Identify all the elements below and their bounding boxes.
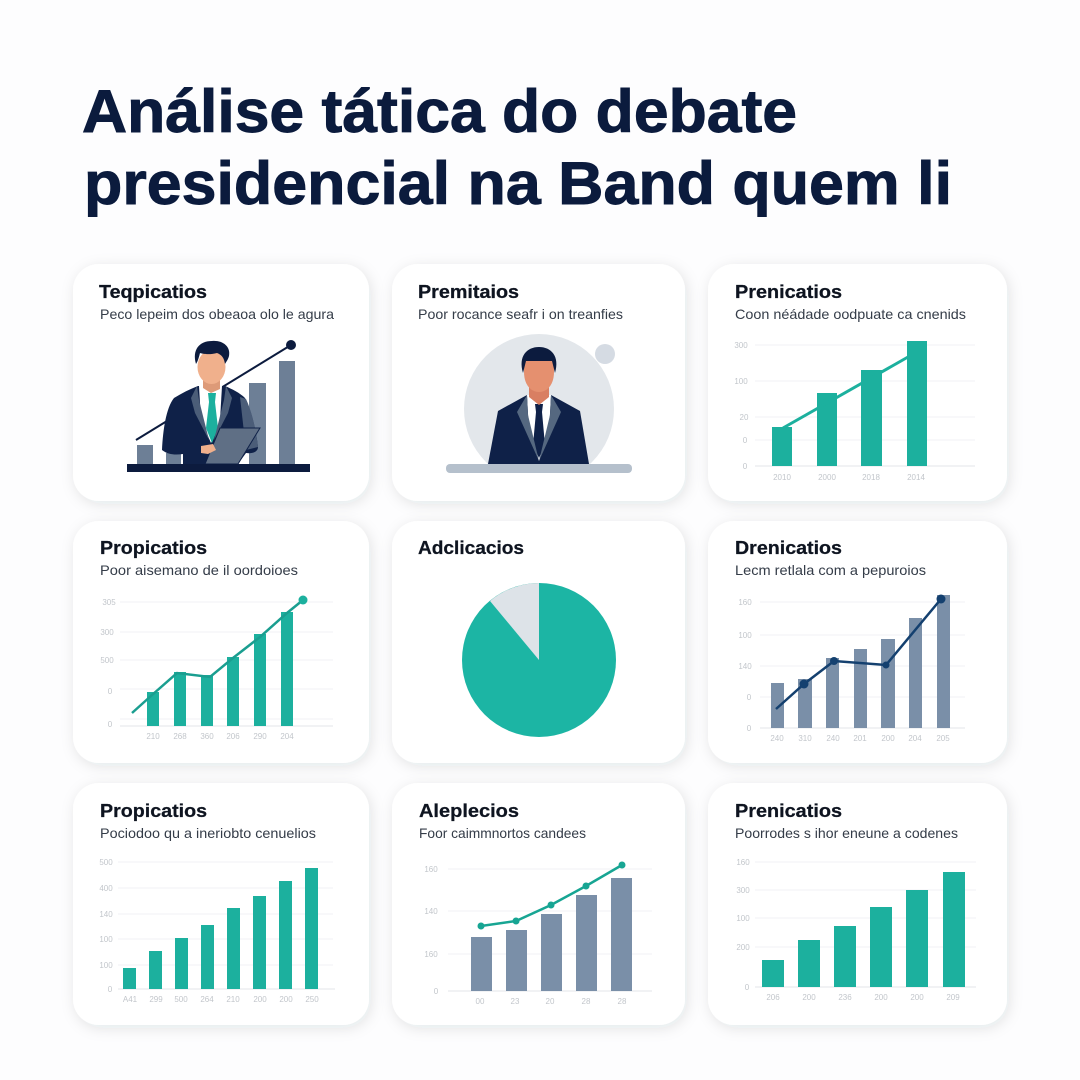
panel: Propicatios (bars): Pociodoo qu a ineriobto cenuelios [100, 825, 316, 841]
bar chart: 0 [743, 462, 748, 471]
combo chart: 300 [100, 628, 114, 637]
bar chart [736, 858, 976, 1002]
bar chart: 100 [99, 935, 113, 944]
bar chart: 2018 [862, 473, 880, 482]
combo chart [100, 596, 333, 741]
combo chart: 23 [511, 997, 520, 1006]
bar chart: 200 [910, 993, 924, 1002]
combo chart: 290 [253, 732, 267, 741]
panel: Premitaios: Poor rocance seafr i on treanfies [418, 306, 623, 322]
combo chart: 200 [881, 734, 895, 743]
combo chart: 20 [546, 997, 555, 1006]
bar chart: 0 [743, 436, 748, 445]
combo chart: 0 [434, 987, 439, 996]
combo chart: 0 [108, 687, 113, 696]
combo chart: 500 [100, 656, 114, 665]
bar chart: 236 [838, 993, 852, 1002]
bar chart: 500 [99, 858, 113, 867]
bar chart: 2010 [773, 473, 791, 482]
combo chart: 204 [280, 732, 294, 741]
panel: Drenicatios: Lecm retlala com a pepuroios [735, 562, 926, 578]
bar chart: 20 [740, 413, 749, 422]
panel: Propicatios (bars): Propicatios [100, 801, 207, 821]
combo chart: 140 [738, 662, 752, 671]
bar chart: 209 [946, 993, 960, 1002]
combo chart: 0 [108, 720, 113, 729]
combo chart: 205 [936, 734, 950, 743]
combo chart: 268 [173, 732, 187, 741]
combo chart: 28 [582, 997, 591, 1006]
panel: Premitaios [392, 264, 685, 501]
bar chart [734, 341, 975, 482]
panel: Prenicatios: Prenicatios [735, 282, 842, 302]
combo chart: 360 [200, 732, 214, 741]
title: Análise tática do debate [82, 78, 797, 145]
panel: Aleplecios [392, 783, 685, 1025]
combo chart: 0 [747, 724, 752, 733]
combo chart: 240 [826, 734, 840, 743]
bar chart: 264 [200, 995, 214, 1004]
combo chart [424, 862, 652, 1006]
bar chart: A41 [123, 995, 138, 1004]
combo chart: 140 [424, 907, 438, 916]
panel: Propicatios (bars) [73, 783, 369, 1025]
combo chart: 305 [102, 598, 116, 607]
combo chart [738, 594, 965, 743]
bar chart: 300 [734, 341, 748, 350]
bar chart: 100 [99, 961, 113, 970]
panel: Premitaios: Premitaios [418, 282, 519, 302]
bar chart: 2000 [818, 473, 836, 482]
panel: Teqpicatios: Peco lepeim dos obeaoa olo le agura [100, 306, 334, 322]
combo chart: 204 [908, 734, 922, 743]
bar chart: 250 [305, 995, 319, 1004]
combo chart: 160 [424, 950, 438, 959]
combo chart: 28 [618, 997, 627, 1006]
bar chart: 200 [874, 993, 888, 1002]
combo chart: 210 [146, 732, 160, 741]
panel: Drenicatios: Drenicatios [735, 538, 842, 558]
panel: Prenicatios (bars): Poorrodes s ihor eneune a codenes [735, 825, 958, 841]
panel: Propicatios (line and bars) [73, 521, 369, 763]
combo chart: 160 [424, 865, 438, 874]
bar chart: 200 [279, 995, 293, 1004]
panel: Teqpicatios [73, 264, 369, 501]
panel: Prenicatios: Coon néádade oodpuate ca cnenids [735, 306, 966, 322]
bar chart: 160 [736, 858, 750, 867]
bar chart: 400 [99, 884, 113, 893]
panel: Propicatios (line and bars): Propicatios [100, 538, 207, 558]
bar chart: 0 [745, 983, 750, 992]
pie chart [462, 583, 616, 737]
combo chart: 00 [476, 997, 485, 1006]
panel: Teqpicatios: Teqpicatios [99, 282, 207, 302]
bar chart: 0 [108, 985, 113, 994]
title: presidencial na Band quem li [84, 150, 952, 217]
panel: Aleplecios: Aleplecios [419, 801, 519, 821]
bar chart: 200 [802, 993, 816, 1002]
bar chart: 140 [99, 910, 113, 919]
bar chart: 210 [226, 995, 240, 1004]
bar chart: 300 [736, 886, 750, 895]
bar chart: 299 [149, 995, 163, 1004]
combo chart: 206 [226, 732, 240, 741]
panel: Prenicatios (bars): Prenicatios [735, 801, 842, 821]
combo chart: 310 [798, 734, 812, 743]
illustration: candidate portrait at podium [446, 334, 632, 484]
combo chart: 201 [853, 734, 867, 743]
bar chart [99, 858, 335, 1004]
panel: Propicatios (line and bars): Poor aisemano de il oordoioes [100, 562, 298, 578]
bar chart: 2014 [907, 473, 925, 482]
bar chart: 100 [734, 377, 748, 386]
title [82, 78, 952, 217]
illustration: presenter with rising chart [127, 340, 310, 472]
panel: Drenicatios [708, 521, 1007, 763]
combo chart: 240 [770, 734, 784, 743]
bar chart: 200 [736, 943, 750, 952]
panel: Prenicatios (bars) [708, 783, 1007, 1025]
bar chart: 206 [766, 993, 780, 1002]
bar chart: 100 [736, 914, 750, 923]
combo chart: 160 [738, 598, 752, 607]
combo chart: 100 [738, 631, 752, 640]
panel: Prenicatios [708, 264, 1007, 501]
bar chart: 500 [174, 995, 188, 1004]
panel: Adclicacios: Adclicacios [418, 538, 524, 558]
combo chart: 0 [747, 693, 752, 702]
panel: Adclicacios [392, 521, 685, 763]
bar chart: 200 [253, 995, 267, 1004]
panel: Aleplecios: Foor caimmnortos candees [419, 825, 586, 841]
